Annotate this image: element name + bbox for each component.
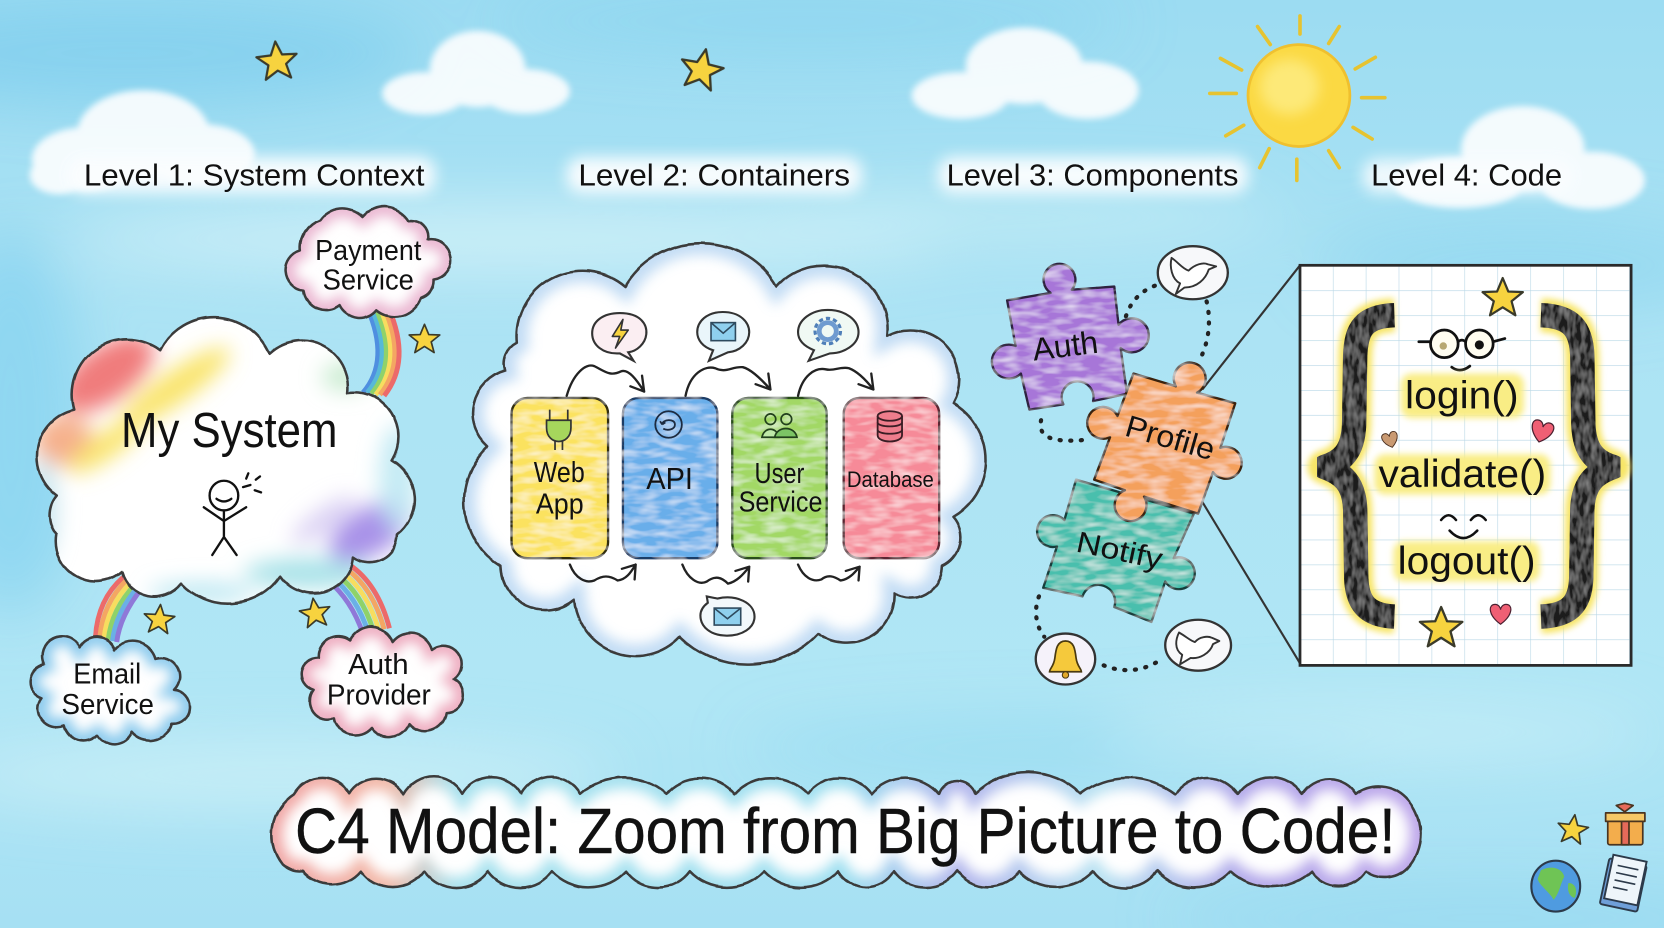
icon: star near payment bbox=[409, 324, 440, 353]
arrow: rainbow to payment service bbox=[363, 308, 399, 396]
icon: notebook bbox=[1600, 854, 1648, 912]
icon: database bbox=[878, 411, 902, 441]
sky cloud: upper left bbox=[30, 90, 255, 194]
bubble: envelope bottom bbox=[700, 596, 755, 636]
cloud: container boundary bbox=[456, 233, 992, 669]
banner: main title: C4 Model: Zoom from Big Picture to Code! bbox=[295, 796, 1396, 867]
code sheet bbox=[1300, 265, 1631, 665]
connector: dotted auth to dove bbox=[1126, 284, 1159, 316]
panel: level 3 components bbox=[992, 246, 1300, 684]
box: api: API bbox=[646, 461, 693, 496]
sky cloud: upper right bbox=[1393, 106, 1645, 209]
icon: star panel bottom bbox=[1420, 607, 1462, 646]
icon: smiling face bbox=[1441, 515, 1486, 538]
icon: dove top bbox=[1158, 246, 1228, 299]
box: user service bbox=[732, 398, 827, 558]
icon: star bottom right bbox=[1556, 813, 1590, 845]
code: logout(): logout() bbox=[1398, 539, 1536, 583]
cloud: email service: Email bbox=[73, 658, 141, 690]
box: user service: User bbox=[755, 458, 805, 490]
brace: left bbox=[1324, 315, 1394, 617]
box: user service: Service bbox=[739, 487, 822, 519]
cloud: my system bbox=[21, 297, 424, 616]
arrow: rainbow to auth provider bbox=[328, 565, 389, 634]
connector: dotted auth to profile bbox=[1041, 420, 1091, 441]
puzzle: notify bbox=[1037, 480, 1195, 622]
icon: heart left bbox=[1381, 431, 1400, 449]
code: validate(): validate() bbox=[1379, 452, 1546, 496]
arrow: web app to api (top) bbox=[567, 366, 644, 396]
puzzle: profile bbox=[1087, 363, 1242, 521]
icon: sun bbox=[1210, 16, 1385, 180]
arrow: api to user service (bottom) bbox=[682, 565, 749, 584]
connector: dotted bell to dove bbox=[1104, 658, 1163, 670]
icon: star top centre bbox=[677, 45, 727, 92]
cloud: email service: Service bbox=[62, 689, 154, 721]
icon: stick figure bbox=[204, 473, 261, 555]
icon: star panel top bbox=[1483, 278, 1523, 315]
bubble: gear bbox=[798, 310, 859, 361]
arrow: api to user service (top) bbox=[686, 367, 770, 396]
heading: level 2: Level 2: Containers bbox=[578, 158, 850, 193]
connector: dotted dove to profile bbox=[1199, 301, 1209, 361]
icon: glasses face bbox=[1419, 330, 1505, 370]
sky cloud: top centre-left bbox=[382, 31, 570, 115]
panel: level 2 containers bbox=[456, 233, 992, 669]
icon: star near auth bbox=[298, 596, 332, 628]
box: database: Database bbox=[847, 467, 934, 492]
icon: plug bbox=[547, 410, 571, 450]
icon: globe bbox=[1531, 861, 1580, 912]
puzzle: auth: Auth bbox=[1030, 324, 1100, 368]
heading: level 4: Level 4: Code bbox=[1371, 158, 1562, 193]
icon: users bbox=[762, 414, 797, 437]
icon: star top left bbox=[255, 40, 299, 80]
icon: dove bottom bbox=[1165, 620, 1231, 671]
box: web app bbox=[512, 398, 608, 558]
puzzle: notify: Notify bbox=[1073, 526, 1166, 576]
heading: level 3: Level 3: Components bbox=[947, 158, 1238, 193]
icon: api circle bbox=[655, 411, 682, 438]
icon: bell bbox=[1036, 634, 1095, 684]
box: database bbox=[844, 398, 939, 558]
cloud: payment service: Service bbox=[323, 265, 414, 297]
brace: right bbox=[1541, 315, 1613, 617]
arrow: web app to api (bottom) bbox=[570, 565, 636, 581]
cloud: payment service bbox=[284, 204, 452, 320]
cloud: email service bbox=[21, 631, 196, 753]
heading: level 1: Level 1: System Context bbox=[84, 158, 425, 193]
label: my system: My System bbox=[121, 404, 337, 458]
panel: level 1 system context bbox=[21, 202, 467, 753]
bubble: envelope top bbox=[697, 312, 749, 361]
cloud: auth provider bbox=[300, 625, 464, 738]
box: web app: App bbox=[536, 489, 584, 521]
banner: main title bbox=[270, 770, 1422, 890]
puzzle: profile: Profile bbox=[1122, 408, 1219, 467]
box: web app: Web bbox=[534, 457, 585, 489]
zoom line: top bbox=[1202, 265, 1300, 389]
zoom line: bottom bbox=[1202, 502, 1300, 663]
arrow: user service to database (bottom) bbox=[798, 565, 860, 580]
icon: heart right bbox=[1528, 419, 1555, 445]
arrow: user service to database (top) bbox=[798, 368, 873, 396]
box: api bbox=[623, 398, 717, 558]
connector: dotted notify to bell bbox=[1036, 596, 1044, 637]
sky cloud: top centre-right bbox=[912, 28, 1139, 119]
puzzle: auth bbox=[992, 264, 1149, 410]
panel: level 4 code bbox=[1300, 265, 1631, 665]
icon: gift box bbox=[1606, 803, 1645, 845]
bubble: lightning bbox=[592, 313, 646, 361]
icon: heart bottom bbox=[1490, 604, 1511, 624]
cloud: auth provider: Auth bbox=[348, 649, 409, 681]
cloud: payment service: Payment bbox=[315, 235, 421, 267]
cloud: auth provider: Provider bbox=[327, 680, 431, 712]
arrow: rainbow to email service bbox=[96, 577, 142, 642]
icon: star near email bbox=[143, 603, 176, 634]
code: login(): login() bbox=[1405, 374, 1519, 418]
